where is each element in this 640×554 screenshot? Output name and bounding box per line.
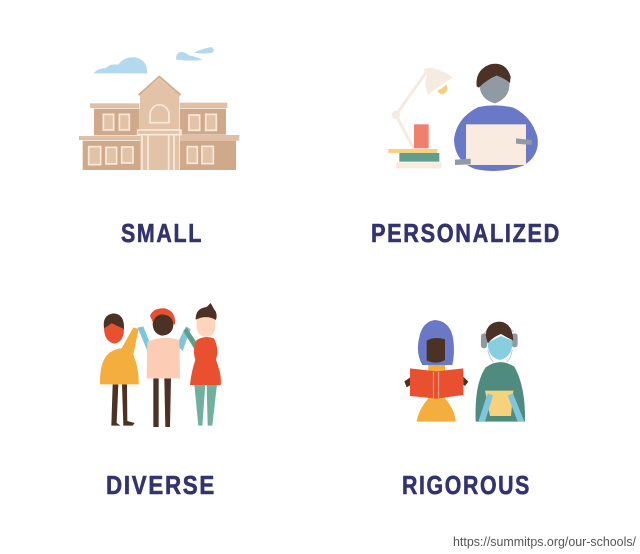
icon: red cup [414,124,429,148]
windows [89,114,216,165]
heading: rigorous: RIGOROUS [402,470,531,500]
upper wings [83,109,236,170]
student hair [476,64,511,88]
heading: small: SMALL [121,218,203,248]
student body [454,105,538,171]
student with headphones [476,322,525,422]
person 3 [183,303,221,426]
heading: personalized: PERSONALIZED [371,218,561,248]
person 2 [138,308,191,427]
entrance porch [138,130,181,170]
student hands [455,138,532,165]
person 1 [100,313,139,426]
tower roof [139,77,181,95]
student face [479,76,509,103]
reader with book [404,320,468,422]
heading: diverse: DIVERSE [106,470,216,500]
laptop [466,124,526,165]
illustration: three diverse friends holding hands [100,303,221,427]
tower arched window [150,105,169,123]
roof bands [79,103,239,141]
illustration: student at laptop with lamp and books [388,64,538,171]
icon: large cloud [93,57,147,73]
source url: https://summitps.org/our-schools/ [453,534,636,549]
illustration: school building with clouds [79,47,239,170]
illustration: two students reading [404,320,525,422]
tower [140,78,179,170]
icon: small cloud [176,47,214,61]
icon: desk lamp [392,68,453,148]
icon: stack of books [388,149,442,168]
